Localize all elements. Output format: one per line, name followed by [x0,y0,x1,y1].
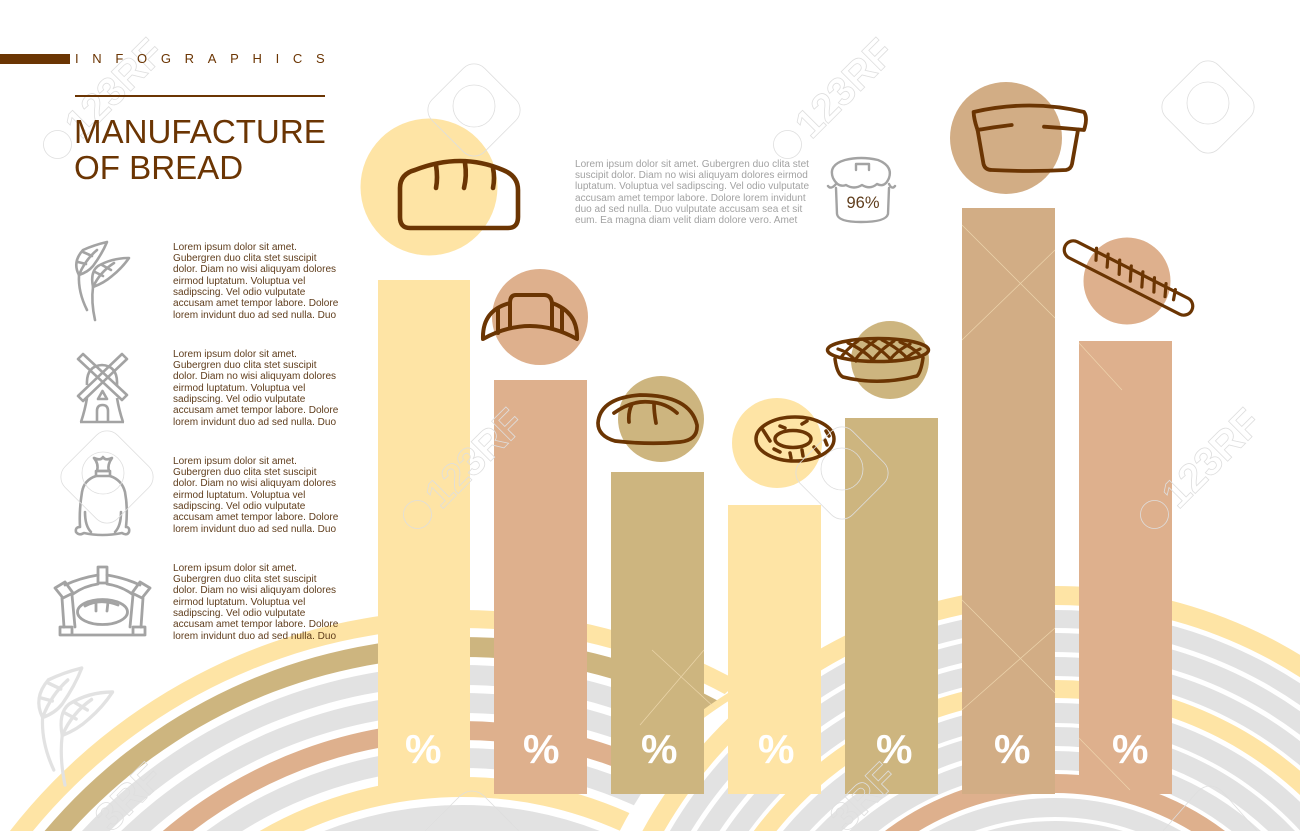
percent labels: % [758,726,794,772]
percent labels: % [641,726,677,772]
bar 7 [1079,341,1172,794]
circle 5 [851,321,929,399]
circle 4 [732,398,822,488]
icon: pie [828,338,928,381]
circle 7 [1084,238,1170,324]
text: 123RF [417,401,533,517]
bar 6 [962,208,1055,794]
percent labels: % [994,726,1030,772]
text: 123RF [1154,401,1270,517]
icon: bagel [756,417,834,461]
bar 5 [845,418,938,794]
center text block: Lorem ipsum dolor sit amet. Gubergren duo clita stet suscipit dolor. Diam no wisi aliquyam dolores eirmod luptatum. Voluptua vel sadipscing. Vel odio vulputate accusam amet tempor labore. Dolore lorem invidunt duo ad sed nulla. Duo vulputate accusam sea et sit eum. Ea magna diam velit diam dolore vero. Amet [575,158,809,226]
icon: bread loaf [400,161,518,228]
text block: oven: Lorem ipsum dolor sit amet. Gubergren duo clita stet suscipit dolor. Diam no wisi aliquyam dolores eirmod luptatum. Voluptua vel sadipscing. Vel odio vulputate accusam amet tempor labore. Dolore lorem invidunt duo ad sed nulla. Duo [173,562,338,642]
percent labels: % [523,726,559,772]
icon: wheat [76,242,129,320]
text block: flour: Lorem ipsum dolor sit amet. Gubergren duo clita stet suscipit dolor. Diam no wisi aliquyam dolores eirmod luptatum. Voluptua vel sadipscing. Vel odio vulputate accusam amet tempor labore. Dolore lorem invidunt duo ad sed nulla. Duo [173,456,338,535]
bar 1 [378,280,470,794]
title: MANUFACTURE OF BREAD [74,114,326,187]
header bar [0,54,70,64]
text block: mill: Lorem ipsum dolor sit amet. Gubergren duo clita stet suscipit dolor. Diam no wisi aliquyam dolores eirmod luptatum. Voluptua vel sadipscing. Vel odio vulputate accusam amet tempor labore. Dolore lorem invidunt duo ad sed nulla. Duo [173,348,338,428]
percent labels: % [876,726,912,772]
pot percentage: 96% [846,194,880,212]
icon: bread tin [974,106,1086,171]
circle 2 [492,269,588,365]
icon: flour sack [76,457,129,535]
bar 4 [728,505,821,794]
icon: bread oven [55,567,150,635]
circle 1 [360,118,498,256]
percent labels: % [405,726,441,772]
text: 123RF [787,31,903,147]
icon: baguette [1061,235,1197,318]
icon: croissant [483,295,577,339]
icon: dough pot [828,158,895,222]
right concentric arcs [620,566,1300,831]
text: 123RF [57,31,173,147]
left concentric arcs [10,610,914,831]
circle 6 [950,82,1062,194]
circle 3 [618,376,704,462]
icon: faded wheat [39,668,113,785]
title rule [75,95,325,97]
bar 2 [494,380,587,794]
percent labels: % [1112,726,1148,772]
eyebrow label: INFOGRAPHICS [75,51,338,66]
bar 3 [611,472,704,794]
icon: windmill [78,354,127,422]
icon: round loaf [598,395,697,443]
text block: wheat: Lorem ipsum dolor sit amet. Gubergren duo clita stet suscipit dolor. Diam no wisi aliquyam dolores eirmod luptatum. Voluptua vel sadipscing. Vel odio vulputate accusam amet tempor labore. Dolore lorem invidunt duo ad sed nulla. Duo [173,242,338,321]
